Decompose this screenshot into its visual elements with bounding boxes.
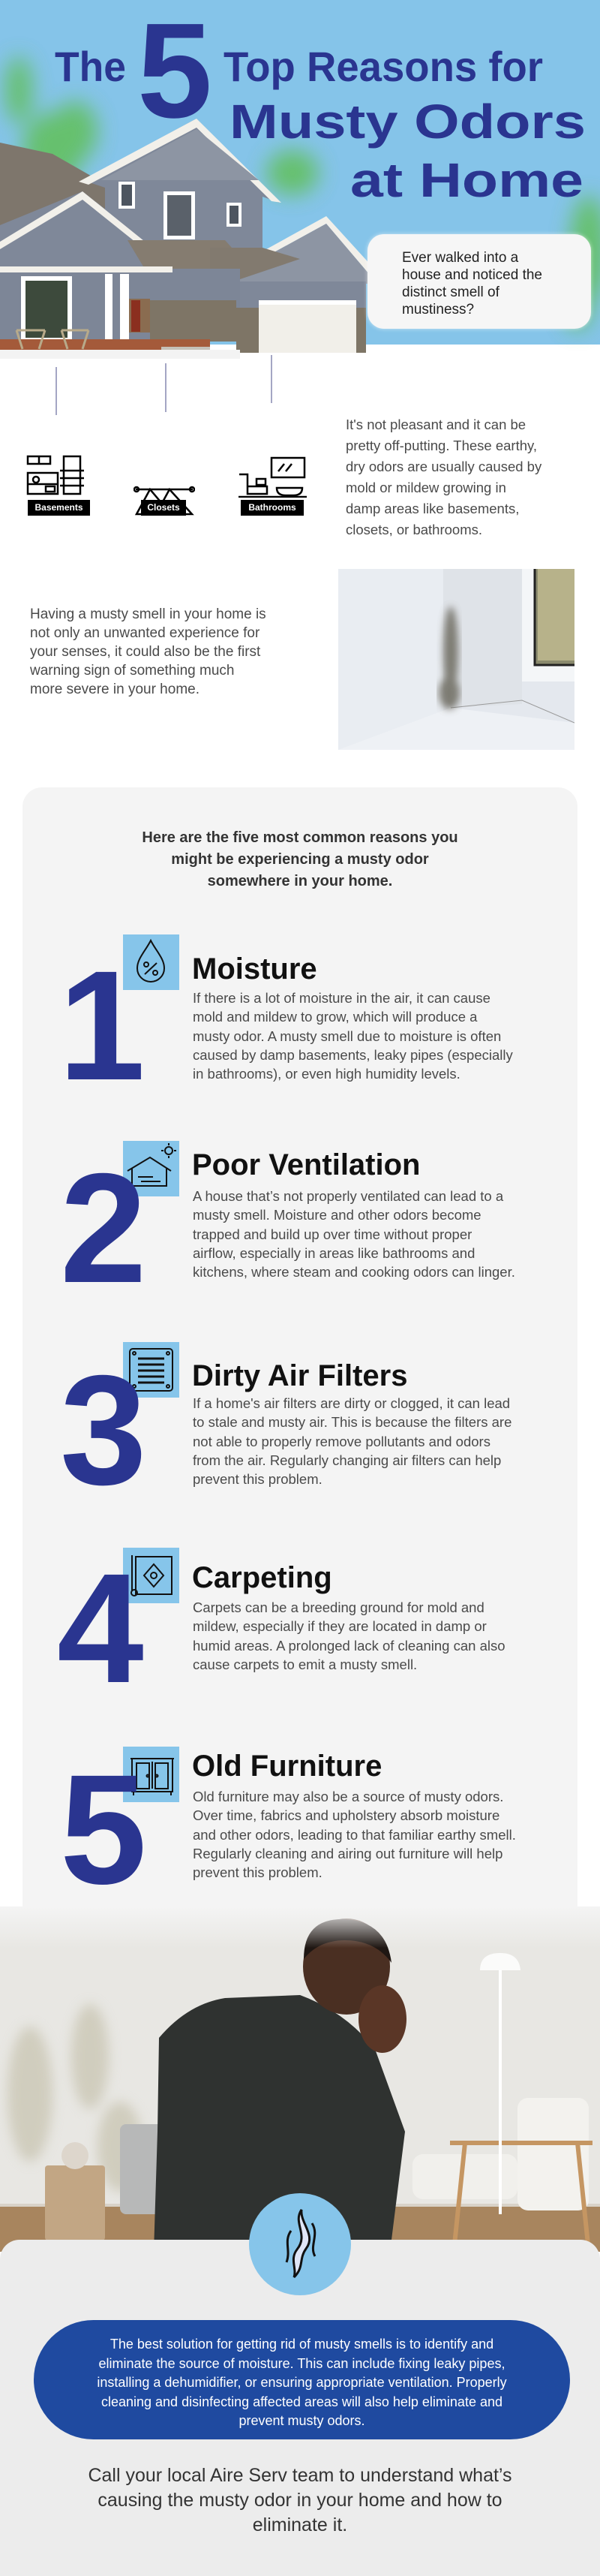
text: intro paragraph: damp areas like basements,: [346, 501, 519, 516]
callout: solution pill: cleaning and disinfecting affected areas will also help eliminate and: [101, 2394, 502, 2409]
icon: bathrooms: [238, 456, 307, 498]
icon: basements: [27, 455, 84, 495]
callout: solution pill: eliminate the source of moisture. This can include fixing leaky pipes,: [99, 2355, 505, 2370]
title: The: [55, 43, 126, 90]
text: warning paragraph: [30, 606, 266, 697]
description: Regularly cleaning and airing out furniture will help: [193, 1846, 502, 1861]
callout: solution pill: installing a dehumidifier, or ensuring appropriate ventilation. Properly: [97, 2375, 507, 2390]
title: Old Furniture: [192, 1750, 382, 1783]
description: humid areas. A prolonged lack of cleaning can also: [193, 1638, 506, 1654]
description: mildew, especially if they are located in damp or: [193, 1618, 487, 1634]
description: [193, 1599, 506, 1672]
callout: question: Ever walked into a: [402, 250, 518, 266]
description: [193, 1395, 512, 1487]
text: intro paragraph: dry odors are usually caused by: [346, 459, 542, 474]
description: to stale and musty air. This is because the filters are: [193, 1414, 512, 1430]
icon: water drop: [123, 934, 179, 990]
house photo: [0, 119, 396, 359]
description: trapped and build up over time without proper: [193, 1226, 472, 1242]
label: basements: Basements: [34, 502, 83, 513]
label: basements: [28, 500, 90, 516]
description: Old furniture may also be a source of musty odors.: [193, 1789, 503, 1804]
description: caused by damp basements, leaky pipes (especially: [193, 1047, 513, 1063]
label: closets: Closets: [147, 502, 180, 513]
description: If a home's air filters are dirty or clogged, it can lead: [193, 1395, 510, 1411]
item 3: dirty air filters: [60, 1342, 512, 1518]
number 2: 2: [60, 1142, 147, 1316]
icon: carpet roll: [123, 1548, 179, 1603]
text: intro paragraph: mold or mildew growing in: [346, 480, 506, 495]
description: prevent this problem.: [193, 1864, 322, 1880]
title: at Home: [350, 153, 584, 207]
description: kitchens, where steam and cooking odors can linger.: [193, 1264, 515, 1280]
description: [193, 1789, 516, 1880]
icon: closets: [134, 486, 195, 515]
panel: five reasons: [22, 787, 578, 1988]
description: musty odor. A musty smell due to moisture is often: [193, 1028, 501, 1044]
text: call to action: [88, 2465, 512, 2535]
label: closets: [141, 500, 186, 516]
description: [193, 1188, 515, 1280]
heading: five reasons intro: Here are the five most common reasons you: [142, 829, 458, 846]
text: intro paragraph: It's not pleasant and it can be: [346, 417, 526, 432]
number 1: 1: [58, 939, 146, 1113]
description: from the air. Regularly changing air filters can help: [193, 1452, 501, 1468]
text: warning paragraph: warning sign of something much: [30, 663, 234, 679]
label: bathrooms: [241, 500, 304, 516]
label: bathrooms: Bathrooms: [248, 502, 296, 513]
description: A house that’s not properly ventilated can lead to a: [193, 1188, 503, 1204]
title: Dirty Air Filters: [192, 1359, 407, 1392]
description: If there is a lot of moisture in the air, it can cause: [193, 990, 490, 1006]
text: warning paragraph: more severe in your home.: [30, 682, 200, 697]
icon: air vent: [123, 1342, 179, 1398]
title: Carpeting: [192, 1561, 332, 1594]
text: warning paragraph: your senses, it could also be the first: [30, 644, 260, 660]
photo: moldy window corner: [338, 569, 574, 750]
description: Over time, fabrics and upholstery absorb moisture: [193, 1807, 500, 1823]
heading: five reasons intro: might be experiencing a musty odor: [171, 851, 429, 868]
title: Poor Ventilation: [192, 1148, 420, 1181]
heading: five reasons intro: somewhere in your home.: [208, 873, 392, 889]
item 5: old furniture: [60, 1743, 516, 1917]
description: and other odors, leading to that familiar earthy smell.: [193, 1827, 516, 1843]
header: sky background with house and title: [0, 0, 600, 359]
description: not able to properly remove pollutants and odors: [193, 1434, 490, 1449]
title: Top Reasons for: [224, 43, 543, 90]
text: intro paragraph: pretty off-putting. These earthy,: [346, 438, 537, 453]
callout: question: distinct smell of: [402, 284, 500, 300]
number 4: 4: [57, 1542, 144, 1716]
callout: solution pill: prevent musty odors.: [238, 2413, 365, 2428]
title: Musty Odors: [230, 95, 586, 149]
title: [55, 0, 586, 207]
description: musty smell. Moisture and other odors become: [193, 1207, 482, 1223]
number 5: 5: [60, 1743, 147, 1917]
number 3: 3: [60, 1344, 147, 1518]
description: [193, 990, 513, 1082]
text: call to action: Call your local Aire Serv team to understand what’s: [88, 2465, 512, 2486]
text: call to action: eliminate it.: [253, 2514, 347, 2535]
connector lines: [56, 355, 272, 415]
description: in bathrooms), or even high humidity levels.: [193, 1066, 460, 1082]
text: intro paragraph: closets, or bathrooms.: [346, 522, 482, 537]
text: intro paragraph: [346, 417, 542, 537]
icon: cabinet: [123, 1747, 179, 1802]
icon: house with wind: [123, 1141, 179, 1196]
description: mold and mildew to grow, which will produce a: [193, 1009, 477, 1025]
item 4: carpeting: [57, 1542, 506, 1716]
callout: solution pill: [34, 2320, 570, 2439]
callout: question: mustiness?: [402, 302, 474, 317]
item 2: poor ventilation: [60, 1141, 515, 1316]
callout: question: house and noticed the: [402, 267, 542, 283]
description: prevent this problem.: [193, 1471, 322, 1487]
text: call to action: causing the musty odor in your home and how to: [98, 2490, 502, 2511]
title: Moisture: [192, 952, 317, 986]
text: warning paragraph: not only an unwanted experience for: [30, 625, 260, 641]
description: airflow, especially in areas like bathrooms and: [193, 1245, 475, 1261]
description: cause carpets to emit a musty smell.: [193, 1657, 417, 1672]
callout: solution pill: The best solution for getting rid of musty smells is to identify and: [110, 2337, 494, 2352]
callout: question: [368, 234, 591, 329]
item 1: moisture: [58, 934, 513, 1113]
description: Carpets can be a breeding ground for mold and: [193, 1599, 484, 1615]
heading: five reasons intro: [142, 829, 458, 889]
icon: odor waves circle: [249, 2193, 351, 2295]
section: bottom solution: [0, 2240, 600, 2576]
photo: man coughing in musty room: [0, 1906, 600, 2252]
text: warning paragraph: Having a musty smell in your home is: [30, 606, 266, 622]
title: 5: [137, 0, 212, 146]
